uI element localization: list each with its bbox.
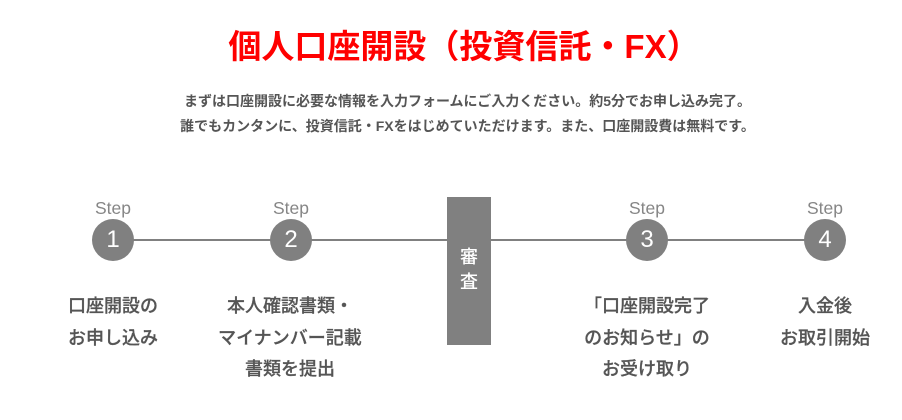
review label: 査 [460,272,478,292]
step 3 label: Step [629,198,665,218]
step 2 circle [270,219,312,261]
step 4 text [780,296,870,348]
step 4 text: お取引開始 [780,328,870,348]
step 2 text: マイナンバー記載 [218,328,362,348]
step 2 text: 書類を提出 [245,359,335,379]
step 4 circle [804,219,846,261]
step 2 text: 本人確認書類・ [227,296,353,316]
intro text: 誰でもカンタンに、投資信託・FXをはじめていただけます。また、口座開設費は無料です。 [180,118,755,134]
review label: 審 [460,247,478,267]
step 3 text: お受け取り [602,359,692,379]
step 2 circle: 2 [284,226,298,253]
step 3 circle: 3 [640,226,654,253]
step 1 circle [92,219,134,261]
step 1 circle: 1 [106,226,120,253]
step 4 circle: 4 [818,226,832,253]
step 4 text: 入金後 [798,296,852,316]
step 4 label: Step [807,198,843,218]
timeline [134,197,804,345]
step 3 circle [626,219,668,261]
title: 個人口座開設（投資信託・FX） [228,28,700,65]
step 3 text [584,296,710,379]
review box [447,197,491,345]
step 1 text [68,296,158,348]
step 1 label: Step [95,198,131,218]
step 2 label: Step [273,198,309,218]
intro text [180,93,755,134]
step 3 text: 「口座開設完了 [584,296,710,316]
connector line [113,239,825,241]
step 1 text: お申し込み [68,328,158,348]
intro text: まずは口座開設に必要な情報を入力フォームにご入力ください。約5分でお申し込み完了。 [184,93,751,109]
step 3 text: のお知らせ」の [584,328,710,348]
step 1 text: 口座開設の [68,296,158,316]
step 2 text [218,296,362,379]
review label [460,247,478,292]
